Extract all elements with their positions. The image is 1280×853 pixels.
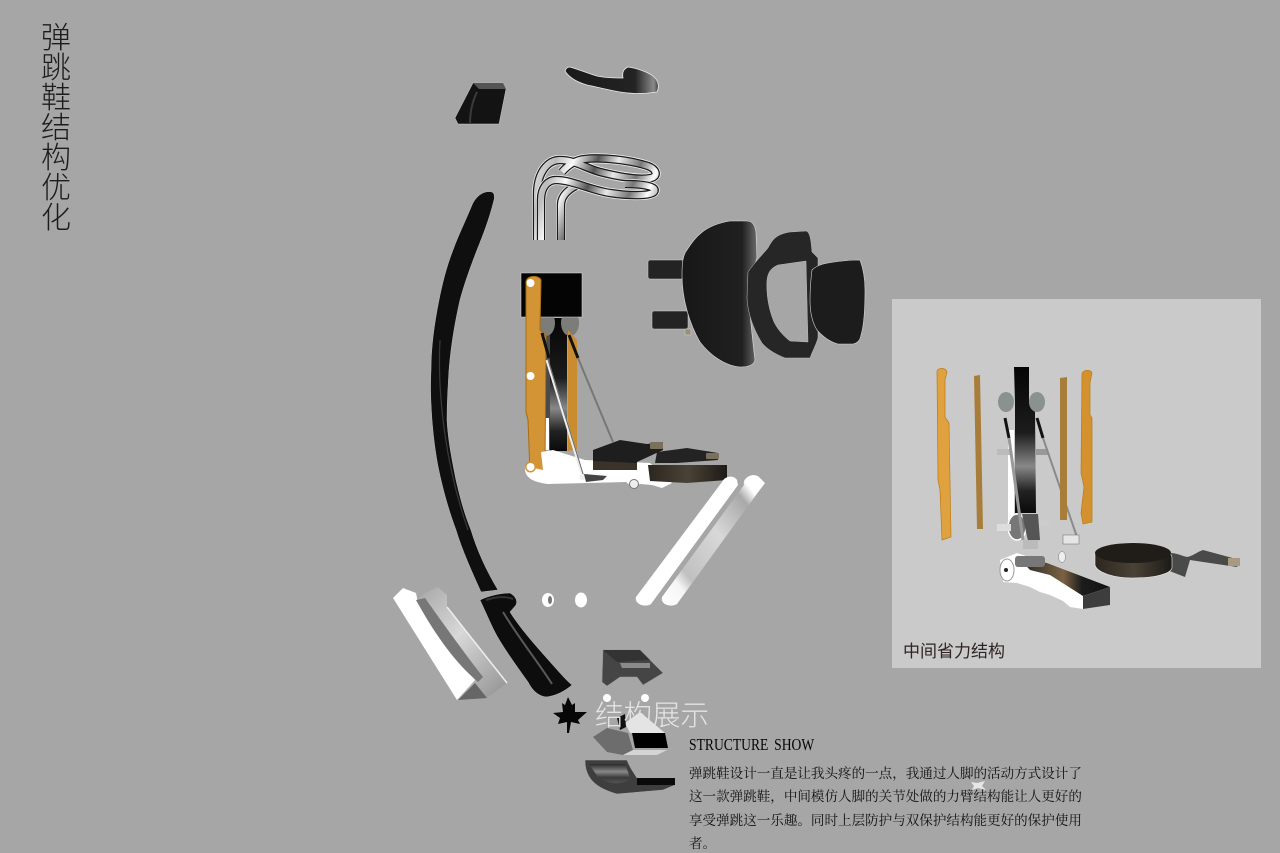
heading: structure show Chinese: 结构展示 [595, 700, 709, 732]
icon: small white pins [542, 592, 587, 608]
icon: outer left orange arm [937, 368, 951, 540]
icon: outer right orange arm [1081, 370, 1092, 524]
icon: white foot base [525, 450, 672, 488]
inset panel: middle structure [892, 299, 1261, 668]
icon: large back cushion [682, 221, 757, 367]
icon: grey discs [537, 310, 555, 336]
icon: maple leaf [553, 697, 587, 733]
panel label: 中间省力结构 [903, 642, 1005, 661]
icon: small insole pad [810, 260, 865, 344]
title: 弹跳鞋结构优化 [41, 22, 71, 235]
icon: disc with tail [1095, 543, 1240, 578]
icon: center column with discs [997, 367, 1079, 562]
icon: front orange arm [526, 276, 546, 473]
icon: left thin strip [974, 375, 983, 529]
icon: lower bottom sole piece [585, 760, 675, 794]
icon: long black outer strap [431, 192, 572, 697]
joint arm mechanism [521, 273, 727, 488]
icon: chrome spring tubes [537, 158, 656, 240]
icon: dark foot plates [593, 440, 663, 470]
icon: small white sparkle [971, 781, 986, 790]
icon: upper bottom clip [602, 650, 663, 686]
icon: curved top hook [565, 67, 658, 94]
icon: middle bottom block [593, 694, 668, 755]
icon: central dark column [550, 318, 567, 451]
text block: description: 弹跳鞋设计一直是让我头疼的一点，我通过人脚的活动方式设计了这一款弹跳鞋，中间模仿人脚的关节处做的力臂结构能让人更好的享受弹跳这一乐趣。同时上层防护与双保护结构能更好的保护使用者。 [689, 762, 1082, 852]
icon: left white blade [393, 587, 507, 700]
icon: D-shaped ring [747, 231, 818, 358]
icon: black heel cap [455, 83, 506, 124]
icon: right white blades [636, 475, 765, 606]
icon: foot arm [1000, 553, 1110, 609]
icon: silver rods [542, 333, 613, 477]
icon: rear orange arm [568, 330, 577, 451]
icon: black top block [521, 273, 582, 317]
seat cushion group [648, 221, 865, 367]
icon: round disc [648, 465, 727, 483]
icon: right thin strip [1060, 377, 1067, 520]
heading: structure show English: STRUCTURE SHOW [689, 735, 814, 754]
icon: mounting straps [648, 257, 691, 335]
